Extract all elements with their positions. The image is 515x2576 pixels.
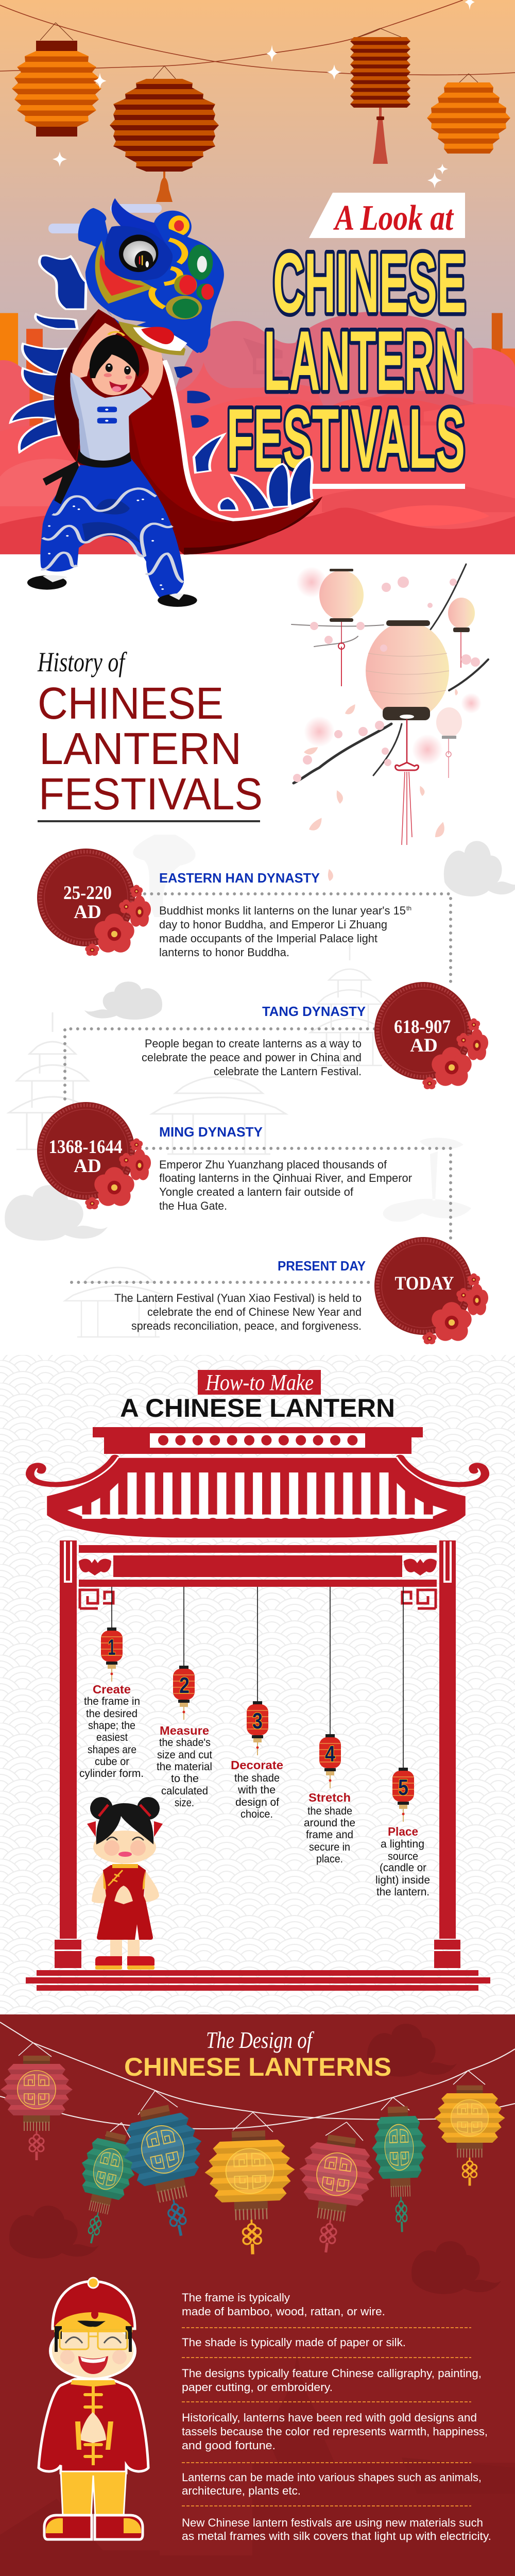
lantern: orange left [12, 41, 101, 137]
design facts: made of bamboo, wood, rattan, or wire. [182, 2305, 385, 2318]
step 5: place: (candle or [380, 1862, 426, 1874]
heading: How-to Make: How-to Make [205, 1370, 314, 1395]
step 2: measure: the shade's [159, 1737, 211, 1749]
badge: 618-907 AD: AD [410, 1035, 438, 1056]
entry: Eastern Han Dynasty: EASTERN HAN DYNASTY [159, 870, 320, 886]
step 2: measure: size. [175, 1797, 194, 1809]
gate: roof [30, 1458, 485, 1538]
design facts: Historically, lanterns have been red with gold designs and [182, 2411, 477, 2424]
lantern: blue [115, 2099, 220, 2244]
garland strings [0, 2022, 515, 2141]
gate illustration [26, 1427, 490, 1991]
entry: Tang Dynasty [142, 1004, 366, 1078]
heading: A Chinese Lantern: A CHINESE LANTERN [120, 1394, 395, 1422]
step 2: measure: the material [157, 1761, 212, 1773]
entry: Ming Dynasty: MING DYNASTY [159, 1124, 263, 1140]
heading: History of: History of [37, 647, 127, 677]
entry: Present Day: spreads reconciliation, peace, and forgiveness. [131, 1319, 362, 1332]
lantern: green right [371, 2106, 429, 2233]
design facts [182, 2291, 491, 2543]
design facts: as metal frames with silk covers that light up with electricity. [182, 2530, 491, 2543]
entry: Eastern Han Dynasty: made occupants of the Imperial Palace light [159, 932, 377, 945]
step 3: decorate: choice. [241, 1808, 273, 1820]
step 1: create: Create [93, 1683, 131, 1696]
heading: Chinese Lantern Festivals: FESTIVALS [39, 769, 263, 819]
step 4: stretch [304, 1587, 355, 1865]
entry: Ming Dynasty: the Hua Gate. [159, 1199, 227, 1212]
pale clouds [48, 204, 162, 233]
badge: Today: TODAY [394, 1273, 454, 1294]
step 3: decorate: with the [237, 1784, 276, 1796]
timeline dotted connectors [65, 894, 451, 1282]
sparkle stars [53, 0, 475, 189]
step 2: measure: to the [171, 1773, 199, 1785]
lantern: orange right [427, 82, 510, 154]
title tag: A Look at [309, 193, 465, 238]
lantern: green [65, 2127, 143, 2249]
panel: hero [0, 0, 515, 607]
dancer: lion head [39, 198, 224, 355]
design facts: architecture, plants etc. [182, 2484, 301, 2497]
string lights [0, 0, 515, 82]
heading: Chinese Lanterns: CHINESE LANTERNS [124, 2053, 391, 2081]
branches [291, 564, 488, 783]
entry: Present Day: celebrate the end of Chinese New Year and [147, 1306, 362, 1318]
step 1: create: the frame in [84, 1696, 140, 1707]
step 3: decorate [231, 1587, 283, 1820]
entry: Present Day: The Lantern Festival (Yuan Xiao Festival) is held to [114, 1292, 362, 1304]
badge: 25-220 AD: 25-220 [63, 883, 112, 904]
step 5: place: Place [388, 1825, 418, 1838]
step 4: stretch: place. [316, 1853, 343, 1865]
step 2: measure: size and cut [157, 1749, 212, 1761]
step 5: place: the lantern. [376, 1886, 430, 1898]
decorative pink lanterns and blossoms [291, 564, 488, 882]
design facts: The designs typically feature Chinese calligraphy, painting, [182, 2367, 482, 2380]
panel: how to make [0, 1355, 515, 2014]
entry: Present Day [114, 1258, 366, 1332]
entry: Tang Dynasty: celebrate the Lantern Festival. [214, 1065, 362, 1078]
badge: 25-220 AD: AD [74, 902, 101, 923]
step 3: decorate: design of [235, 1797, 279, 1808]
design facts: New Chinese lantern festivals are using new materials such [182, 2516, 483, 2529]
entry: Eastern Han Dynasty: Buddhist monks lit lanterns on the lunar year's 15 [159, 904, 406, 917]
step 1: create: cylinder form. [79, 1768, 144, 1780]
step 1: create: easiest [96, 1732, 128, 1743]
step 3: decorate: Decorate [231, 1758, 283, 1772]
step 4: stretch: frame and [306, 1829, 353, 1841]
badge: 618-907 AD: 618-907 [394, 1016, 451, 1038]
dancer: body [27, 323, 197, 607]
step 3: decorate: the shade [234, 1772, 280, 1784]
entry: Eastern Han Dynasty: th [406, 905, 411, 912]
step 5: place: light) inside [375, 1874, 430, 1886]
badge: 618-907 AD [374, 982, 488, 1089]
dancer: cape and fins [10, 309, 322, 554]
lantern: crimson center [288, 2131, 380, 2258]
lantern: dark cylinder [350, 37, 410, 164]
entry: Tang Dynasty: People began to create lanterns as a way to [145, 1037, 362, 1050]
heading: Chinese Lantern Festivals [38, 679, 263, 822]
entry: Present Day: PRESENT DAY [278, 1258, 366, 1274]
badge: 1368-1644 AD: 1368-1644 [48, 1137, 123, 1158]
badge: 1368-1644 AD [37, 1102, 151, 1209]
step 1: create: shape; the [88, 1720, 135, 1732]
design facts: The frame is typically [182, 2291, 290, 2304]
lion dancer [10, 198, 322, 607]
entry: Tang Dynasty: celebrate the peace and power in China and [142, 1051, 362, 1064]
step 1: create: shapes are [88, 1744, 136, 1756]
step 4: stretch: around the [304, 1817, 355, 1829]
entry: Ming Dynasty [159, 1124, 412, 1212]
step 1: create: cube or [95, 1756, 129, 1768]
title tag: A Look at: A Look at [333, 198, 454, 238]
step 2: measure: calculated [161, 1785, 208, 1797]
step 5: place: source [388, 1851, 418, 1862]
step 4: stretch: secure in [309, 1841, 350, 1853]
lantern: yellow right [434, 2086, 505, 2186]
entry: Ming Dynasty: floating lanterns in the Qinhuai River, and Emperor [159, 1172, 412, 1184]
lantern: yellow center [203, 2129, 298, 2256]
entry: Eastern Han Dynasty [159, 870, 411, 959]
character: man [39, 2278, 148, 2539]
design facts: tassels because the color red represents warmth, happiness, [182, 2425, 488, 2438]
step 3: decorate: 3 [252, 1708, 263, 1734]
design facts: paper cutting, or embroidery. [182, 2381, 333, 2394]
step 4: stretch: 4 [325, 1741, 335, 1767]
heading: Chinese Lantern Festivals: LANTERN [39, 724, 242, 774]
heading: Chinese Lantern Festivals: CHINESE [38, 679, 224, 728]
badge: 25-220 AD [37, 849, 151, 956]
entry: Eastern Han Dynasty: day to honor Buddha, and Emperor Li Zhuang [159, 918, 387, 931]
hero background: hills and temples [0, 312, 515, 554]
title: CHINESE LANTERN FESTIVALS [227, 235, 466, 489]
design facts: Lanterns can be made into various shapes such as animals, [182, 2471, 482, 2484]
step 2: measure [157, 1587, 212, 1809]
entry: Eastern Han Dynasty: lanterns to honor Buddha. [159, 946, 289, 959]
entry: Ming Dynasty: Emperor Zhu Yuanzhang placed thousands of [159, 1158, 387, 1171]
lantern: crimson left [1, 2056, 73, 2160]
character: girl [87, 1797, 163, 1970]
design facts: The shade is typically made of paper or silk. [182, 2336, 406, 2349]
step 1: create [79, 1587, 144, 1780]
ghost background shapes [5, 835, 515, 1337]
design facts: and good fortune. [182, 2439, 276, 2452]
step 2: measure: Measure [160, 1724, 209, 1737]
step 4: stretch: the shade [307, 1805, 352, 1817]
badge: Today [374, 1237, 488, 1344]
panel: history [5, 564, 515, 1344]
entry: Tang Dynasty: TANG DYNASTY [262, 1004, 366, 1019]
step 1: create: the desired [86, 1708, 138, 1720]
ghost clouds and temples [0, 2024, 515, 2576]
step 2: measure: 2 [179, 1673, 190, 1698]
gate: beams and pillars [26, 1540, 490, 1991]
gate: bat ornaments and frets [79, 1559, 437, 1608]
entry: Ming Dynasty: Yongle created a lantern fair outside of [159, 1185, 354, 1198]
step 5: place: a lighting [381, 1838, 424, 1850]
panel: design of lanterns [0, 2014, 515, 2576]
step 5: place: 5 [398, 1775, 408, 1800]
step 5: place [375, 1587, 430, 1898]
gate: top plaque [93, 1427, 423, 1454]
lantern: dark large [110, 79, 219, 202]
badge: 1368-1644 AD: AD [74, 1156, 101, 1177]
step 1: create: 1 [108, 1635, 115, 1660]
step 4: stretch: Stretch [308, 1791, 351, 1804]
heading: The Design of: The Design of [206, 2027, 315, 2053]
